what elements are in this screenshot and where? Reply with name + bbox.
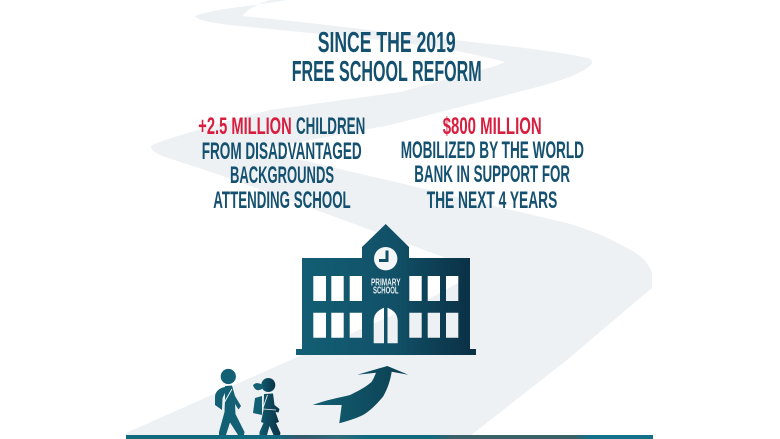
text block: children statistic: BACKGROUNDS	[230, 162, 334, 189]
footer bar	[126, 435, 653, 439]
text block: children statistic: +2.5 MILLION	[198, 113, 292, 140]
text block: funding statistic	[401, 113, 584, 214]
text block: children statistic	[198, 113, 365, 214]
school sign text: SCHOOL	[373, 284, 399, 296]
text block: funding statistic: BANK IN SUPPORT FOR	[414, 161, 570, 188]
title: FREE SCHOOL REFORM	[292, 56, 482, 88]
text block: funding statistic: THE NEXT 4 YEARS	[427, 187, 557, 214]
icon: clock	[374, 247, 397, 270]
icon: primary school building	[296, 224, 476, 355]
title: SINCE THE 2019	[318, 27, 456, 59]
school sign text	[371, 276, 400, 296]
text block: funding statistic: $800 MILLION	[443, 113, 542, 140]
text block: children statistic: FROM DISADVANTAGED	[202, 138, 362, 165]
icon: girl walking with backpack	[253, 378, 280, 435]
arrow pointing to school	[313, 366, 408, 423]
text block: children statistic: CHILDREN	[296, 113, 365, 140]
text block: children statistic: ATTENDING SCHOOL	[213, 187, 351, 214]
icon: boy walking with backpack	[215, 369, 244, 435]
title	[292, 27, 482, 88]
school sign text: PRIMARY	[371, 276, 400, 288]
winding road background	[126, 0, 652, 436]
text block: funding statistic: MOBILIZED BY THE WORLD	[401, 137, 584, 164]
